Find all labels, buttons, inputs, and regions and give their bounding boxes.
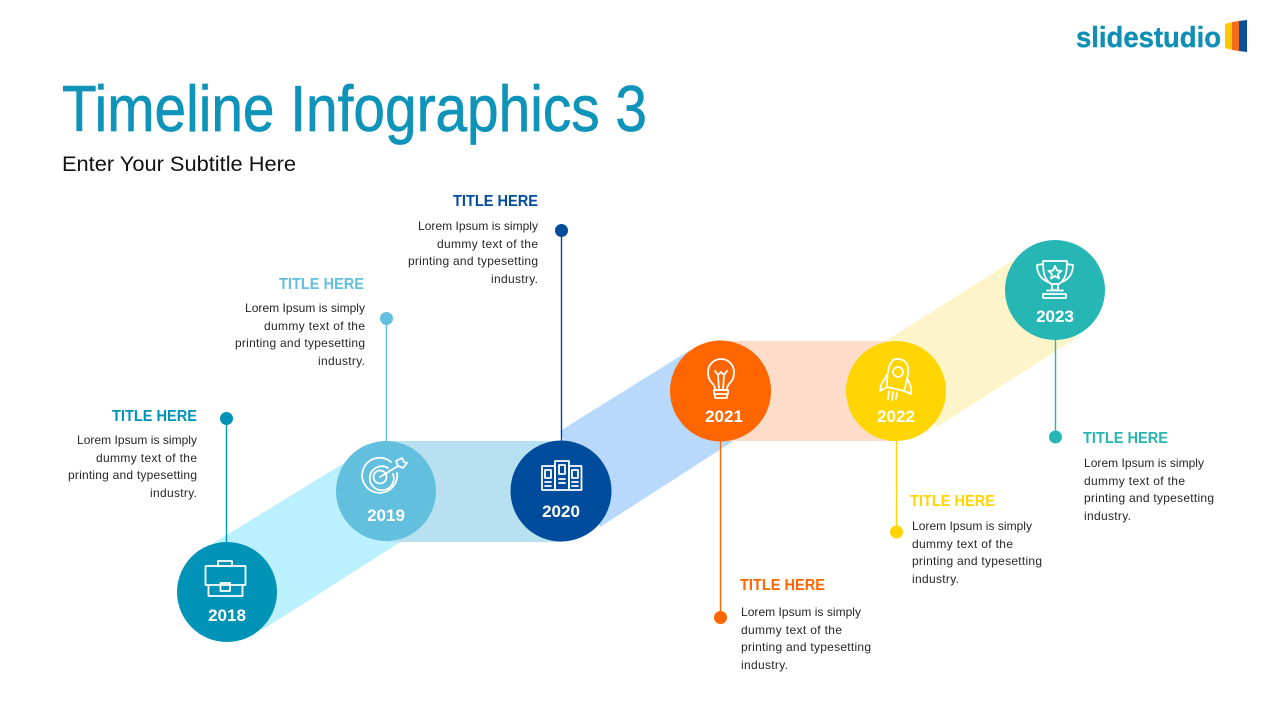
text block 2018: TITLE HERE [112,408,197,425]
text block 2023: dummy text of the [1084,474,1185,488]
text block 2020 [408,193,538,286]
text block 2018: printing and typesetting [68,468,197,482]
text block 2023: printing and typesetting [1084,491,1214,505]
timeline ribbon [212,256,1078,630]
milestone 2018: 2018 [208,606,246,625]
text block 2019: printing and typesetting [235,336,365,350]
text block 2023 [1083,430,1214,523]
milestone 2023 [1005,240,1105,340]
milestone 2020: 2020 [542,502,580,521]
text block 2022: Lorem Ipsum is simply [912,519,1032,533]
logo: slidestudio: slidestudio [1076,22,1221,54]
milestone 2020 [510,440,612,542]
text block 2019: Lorem Ipsum is simply [245,301,365,315]
text block 2018: industry. [150,486,197,500]
icon: briefcase [206,561,246,596]
milestone 2022: 2022 [877,407,915,426]
milestone 2023: 2023 [1036,307,1074,326]
milestone 2021: 2021 [705,407,743,426]
text block 2019: TITLE HERE [279,276,364,293]
dots [220,224,1062,624]
text block 2021: industry. [741,658,788,672]
connector lines [226,230,1056,617]
icon: buildings [542,461,582,490]
text block 2021: dummy text of the [741,623,842,637]
milestone 2021 [670,340,771,442]
milestone 2019: 2019 [367,506,405,525]
text block 2018: Lorem Ipsum is simply [77,433,197,447]
text block 2022: TITLE HERE [910,493,995,510]
icon: light bulb [708,359,734,398]
milestone 2019 [336,441,436,541]
text block 2019: industry. [318,354,365,368]
icon: trophy [1037,261,1073,298]
text block 2021 [740,577,871,672]
text block 2018: dummy text of the [96,451,197,465]
text block 2021: Lorem Ipsum is simply [741,605,861,619]
text block 2020: dummy text of the [437,237,538,251]
text block 2022: printing and typesetting [912,554,1042,568]
text block 2023: TITLE HERE [1083,430,1168,447]
text block 2023: Lorem Ipsum is simply [1084,456,1204,470]
text block 2019 [235,276,365,368]
text block 2023: industry. [1084,509,1131,523]
text block 2022 [910,493,1042,586]
text block 2021: TITLE HERE [740,577,825,594]
text block 2020: printing and typesetting [408,254,538,268]
milestone 2022 [846,341,946,441]
text block 2018 [68,408,197,500]
milestone 2018 [177,542,277,642]
icon: target [362,458,407,493]
icon: rocket [880,359,911,400]
text block 2019: dummy text of the [264,319,365,333]
text block 2020: industry. [491,272,538,286]
text block 2021: printing and typesetting [741,640,871,654]
title: Timeline Infographics 3 [62,72,647,145]
text block 2022: industry. [912,572,959,586]
text block 2020: TITLE HERE [453,193,538,210]
subtitle: Enter Your Subtitle Here [62,153,296,176]
text block 2020: Lorem Ipsum is simply [418,219,538,233]
text block 2022: dummy text of the [912,537,1013,551]
